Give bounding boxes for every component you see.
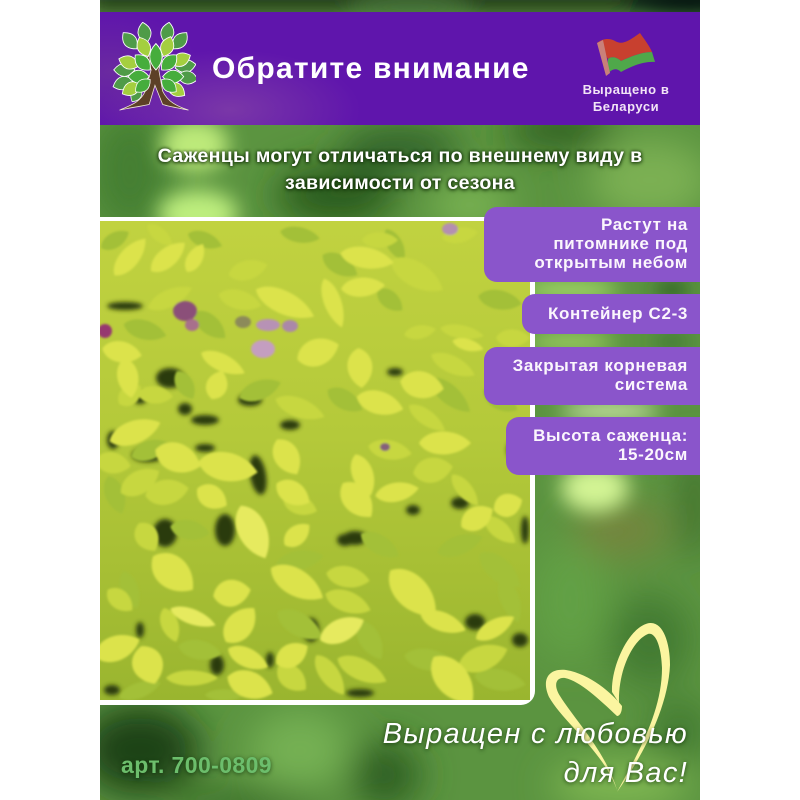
feature pill: open-air nursery: Растут на — [601, 215, 688, 234]
slogan: для Вас! — [564, 757, 688, 789]
feature pill: open-air nursery — [484, 207, 700, 282]
background: blurred green foliage — [100, 0, 700, 800]
logo: tree — [112, 22, 196, 110]
lightest leaf highlights — [168, 500, 369, 651]
header band — [100, 12, 700, 125]
notice text — [155, 145, 644, 194]
feature pill: container: Контейнер С2-3 — [548, 304, 688, 323]
feature pill: open-air nursery: открытым небом — [534, 253, 688, 272]
feature pill: seedling height — [506, 417, 700, 475]
notice text: зависимости от сезона — [285, 172, 515, 194]
pink-purple flower clusters — [98, 223, 458, 451]
feature pill: seedling height: 15-20см — [618, 445, 688, 464]
icon: Belarus flag — [597, 33, 655, 76]
bright yellow leaves — [90, 232, 526, 713]
shadow gaps between leaves — [104, 302, 529, 697]
background mid-green leaves — [97, 224, 527, 705]
slogan — [382, 718, 688, 789]
caption: grown in Belarus: Выращено в — [583, 82, 669, 97]
caption: grown in Belarus: Беларуси — [593, 99, 659, 114]
feature pill: open-air nursery: питомнике под — [553, 234, 688, 253]
tree trunk and roots — [120, 51, 188, 110]
article number: арт. 700-0809 — [121, 752, 272, 778]
feature pill: container — [522, 294, 700, 334]
notice text: Саженцы могут отличаться по внешнему виду в — [158, 145, 642, 167]
feature pill: seedling height: Высота саженца: — [533, 426, 688, 445]
photo: spirea foliage with white frame — [100, 217, 535, 705]
feature pill: closed root system: система — [615, 375, 688, 394]
slogan: Выращен с любовью — [383, 718, 688, 750]
title: Обратите внимание — [212, 52, 530, 85]
feature pill: closed root system — [484, 347, 700, 405]
caption: grown in Belarus — [583, 82, 669, 114]
feature pill: closed root system: Закрытая корневая — [513, 356, 688, 375]
tree crown leaves — [111, 21, 199, 104]
icon: hand-drawn heart — [546, 623, 670, 792]
mid yellow leaves — [93, 220, 530, 700]
